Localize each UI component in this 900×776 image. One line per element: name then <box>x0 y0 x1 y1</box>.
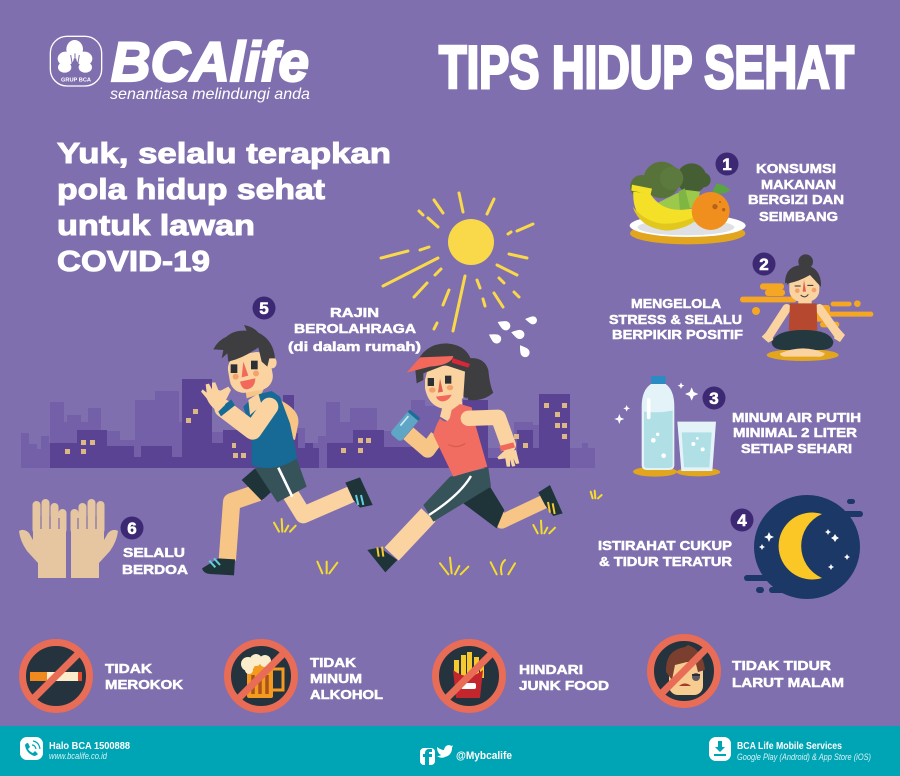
tank top <box>433 404 487 477</box>
label: MENGELOLA <box>631 296 722 311</box>
number badge 3 <box>702 386 726 410</box>
prohibition: no alcohol <box>228 642 383 710</box>
headline: COVID-19 <box>57 246 210 278</box>
label: ISTIRAHAT CUKUP <box>598 538 732 553</box>
logo wordmark: BCAlife <box>111 30 309 93</box>
label: MINUM <box>310 671 362 686</box>
label: & TIDUR TERATUR <box>599 554 733 569</box>
label: KONSUMSI <box>756 161 836 176</box>
face details <box>428 378 434 386</box>
icon: social media <box>420 745 453 765</box>
tip 1: nutritious food <box>630 152 844 244</box>
contact: phone <box>49 741 130 761</box>
label: rajin berolahraga: BEROLAHRAGA <box>294 321 417 336</box>
label: BERDOA <box>122 562 189 577</box>
front leg <box>290 493 352 515</box>
number badge 2 <box>752 252 776 276</box>
icon: water bottle and glass <box>614 376 720 477</box>
headline: Yuk, selalu terapkan <box>57 138 391 170</box>
label: STRESS & SELALU <box>609 312 742 327</box>
headline: pola hidup sehat <box>57 174 325 206</box>
number badge 1 <box>716 152 738 176</box>
tip 6: pray <box>19 503 189 578</box>
front leg <box>392 515 428 554</box>
runner: man <box>201 325 373 575</box>
label: BERGIZI DAN <box>748 192 844 207</box>
neck <box>245 380 268 398</box>
label: MINIMAL 2 LITER <box>733 425 858 440</box>
icon: moon <box>744 495 863 599</box>
label <box>105 661 184 692</box>
front shoe <box>367 547 397 572</box>
bottle <box>390 409 420 442</box>
jersey <box>243 391 297 468</box>
contact: social: @Mybcalife <box>456 750 512 762</box>
logo: BCA Life <box>50 30 310 103</box>
number badge 6 <box>120 516 144 540</box>
headline: untuk lawan <box>57 210 255 242</box>
icon: fries <box>436 642 502 710</box>
label: rajin berolahraga: RAJIN <box>330 305 379 320</box>
label: SEIMBANG <box>759 209 838 224</box>
icon: praying hands <box>19 503 118 578</box>
back shoe <box>202 558 235 575</box>
prohibition: no smoking <box>22 642 184 710</box>
grass tufts <box>274 491 602 574</box>
label: HINDARI <box>519 662 583 677</box>
label: rajin berolahraga <box>288 305 421 354</box>
label <box>732 658 844 690</box>
back shorts <box>463 487 504 528</box>
city skyline <box>21 379 595 468</box>
label: BERPIKIR POSITIF <box>612 327 743 342</box>
number badge 5 <box>252 296 276 320</box>
contact: phone: www.bcalife.co.id <box>49 751 108 761</box>
prohibition: no staying up late <box>650 638 844 704</box>
hair <box>415 343 473 398</box>
icon: emblem <box>50 36 102 86</box>
hair <box>213 325 275 367</box>
icon: food plate <box>630 162 746 244</box>
label: ALKOHOL <box>310 687 383 702</box>
icon: cigarette <box>22 642 90 710</box>
icon: emblem: GRUP BCA <box>61 77 91 83</box>
label <box>748 161 844 224</box>
label: rajin berolahraga: (di dalam rumah) <box>288 339 421 354</box>
hand <box>497 450 519 467</box>
tagline: senantiasa melindungi anda <box>110 86 310 103</box>
neck <box>440 398 463 422</box>
front shorts <box>423 467 491 522</box>
shorts <box>242 468 273 501</box>
tip 3: drink water <box>614 376 861 477</box>
tip 4: sleep <box>598 495 863 599</box>
label: MINUM AIR PUTIH <box>732 410 861 425</box>
label <box>609 296 743 342</box>
number badge 1: 1 <box>722 155 732 174</box>
label <box>122 545 189 577</box>
number badge 6: 6 <box>127 519 137 538</box>
contact: app: Google Play (Android) & App Store (iOS) <box>737 752 871 762</box>
number badge 4 <box>730 508 754 532</box>
number badge 2: 2 <box>759 255 769 274</box>
label <box>732 410 861 456</box>
label: TIDAK TIDUR <box>732 658 832 673</box>
head <box>226 350 275 395</box>
prohibition: no junk food <box>436 642 609 710</box>
label <box>519 662 609 693</box>
headline <box>57 138 391 278</box>
label: JUNK FOOD <box>519 678 609 693</box>
back leg <box>492 502 544 522</box>
icon: download <box>709 737 731 761</box>
label <box>310 655 383 702</box>
label: MEROKOK <box>105 677 184 692</box>
number badge 4: 4 <box>737 511 747 530</box>
contact: app: BCA Life Mobile Services <box>737 741 842 752</box>
icon: meditating woman <box>740 254 873 361</box>
label: SETIAP SEHARI <box>741 441 852 456</box>
icon: beer mug <box>228 642 294 710</box>
label: SELALU <box>123 545 185 560</box>
head <box>425 365 465 408</box>
back arm <box>280 400 298 440</box>
contact: app <box>737 741 871 762</box>
front arm <box>223 407 269 431</box>
back leg <box>227 492 261 560</box>
back shoe <box>538 485 563 516</box>
hand <box>201 382 231 412</box>
icon: phone <box>20 737 43 760</box>
left arm <box>408 433 437 450</box>
label: LARUT MALAM <box>732 675 844 690</box>
contact: phone: Halo BCA 1500888 <box>49 741 130 752</box>
icon: sun <box>381 193 533 331</box>
front shoe <box>345 477 373 508</box>
number badge 3: 3 <box>709 389 719 408</box>
number badge 5: 5 <box>259 299 269 318</box>
label <box>598 538 733 569</box>
right arm <box>468 417 508 445</box>
ponytail <box>460 358 493 400</box>
visor <box>407 356 453 373</box>
tip 2: manage stress <box>609 252 873 361</box>
footer bar <box>0 726 900 776</box>
runner: woman <box>367 343 563 572</box>
label: TIDAK <box>105 661 153 676</box>
icon: sweat drops <box>487 315 538 359</box>
face details <box>231 364 237 373</box>
icon: tired face <box>650 638 718 704</box>
label: MAKANAN <box>761 177 836 192</box>
label: TIDAK <box>310 655 357 670</box>
